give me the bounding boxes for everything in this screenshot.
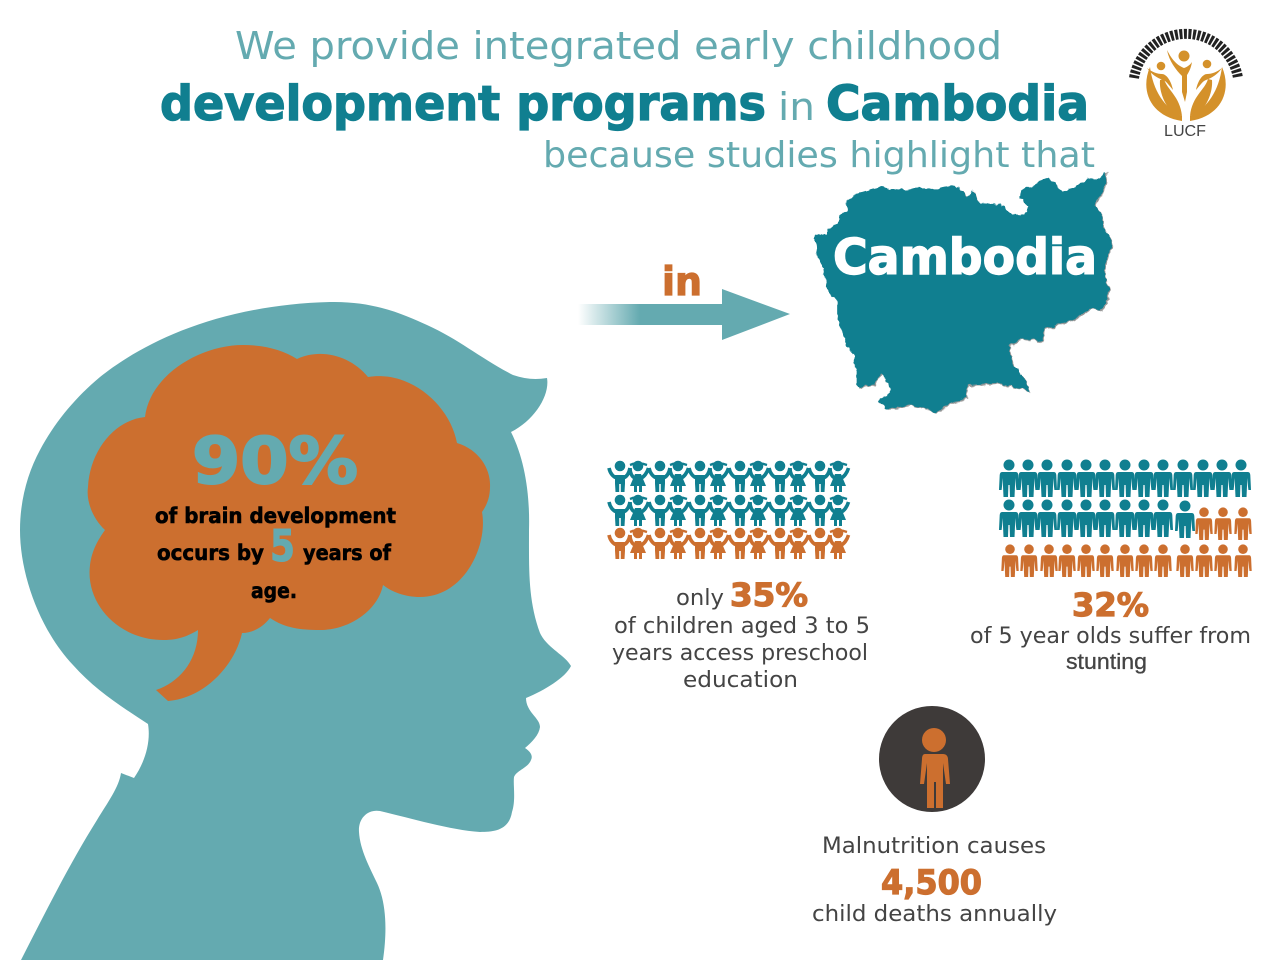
preschool statistic: only bbox=[676, 586, 724, 611]
preschool statistic: education bbox=[683, 668, 798, 693]
title line 2: development programs bbox=[160, 76, 766, 132]
brain text line 1: of brain development bbox=[155, 504, 396, 528]
brain text line 2 bbox=[157, 521, 392, 572]
stunting statistic bbox=[970, 586, 1251, 674]
icon: malnourished child bbox=[879, 706, 985, 812]
preschool statistic: years access preschool bbox=[612, 641, 868, 666]
head silhouette bbox=[20, 302, 571, 960]
arrow bbox=[578, 289, 790, 340]
map of Cambodia: Cambodia bbox=[833, 229, 1097, 286]
title bbox=[160, 24, 1095, 176]
stunting statistic: 32% bbox=[1072, 586, 1149, 624]
logo: LUCF bbox=[1134, 34, 1238, 140]
brain text line 2: occurs by bbox=[157, 541, 264, 565]
brain text line 3: age. bbox=[251, 579, 297, 603]
malnutrition statistic: Malnutrition causes bbox=[822, 834, 1046, 859]
title line 1: We provide integrated early childhood bbox=[235, 24, 1002, 68]
title line 2 bbox=[160, 76, 1089, 132]
brain text line 2: 5 bbox=[270, 521, 295, 572]
preschool statistic: 35% bbox=[730, 576, 808, 614]
title line 3: because studies highlight that bbox=[543, 135, 1095, 176]
pictogram: people 32 percent bbox=[999, 460, 1252, 577]
pictogram: children 35 percent bbox=[609, 461, 848, 559]
logo: LUCF: LUCF bbox=[1164, 123, 1206, 140]
malnutrition statistic: 4,500 bbox=[881, 863, 982, 903]
stunting statistic: of 5 year olds suffer from bbox=[970, 624, 1251, 649]
malnutrition statistic bbox=[812, 834, 1057, 927]
brain statistic bbox=[155, 425, 396, 603]
brain text line 2: years of bbox=[303, 541, 392, 565]
in label: in bbox=[662, 260, 702, 305]
title line 2: Cambodia bbox=[826, 76, 1089, 132]
map of Cambodia bbox=[815, 172, 1113, 414]
speech cloud bbox=[88, 345, 490, 701]
90%: 90% bbox=[192, 425, 358, 499]
title line 2: in bbox=[778, 85, 815, 129]
malnutrition statistic: child deaths annually bbox=[812, 902, 1057, 927]
preschool statistic: of children aged 3 to 5 bbox=[614, 614, 870, 639]
stunting statistic: stunting bbox=[1066, 649, 1147, 674]
preschool statistic bbox=[612, 576, 870, 693]
